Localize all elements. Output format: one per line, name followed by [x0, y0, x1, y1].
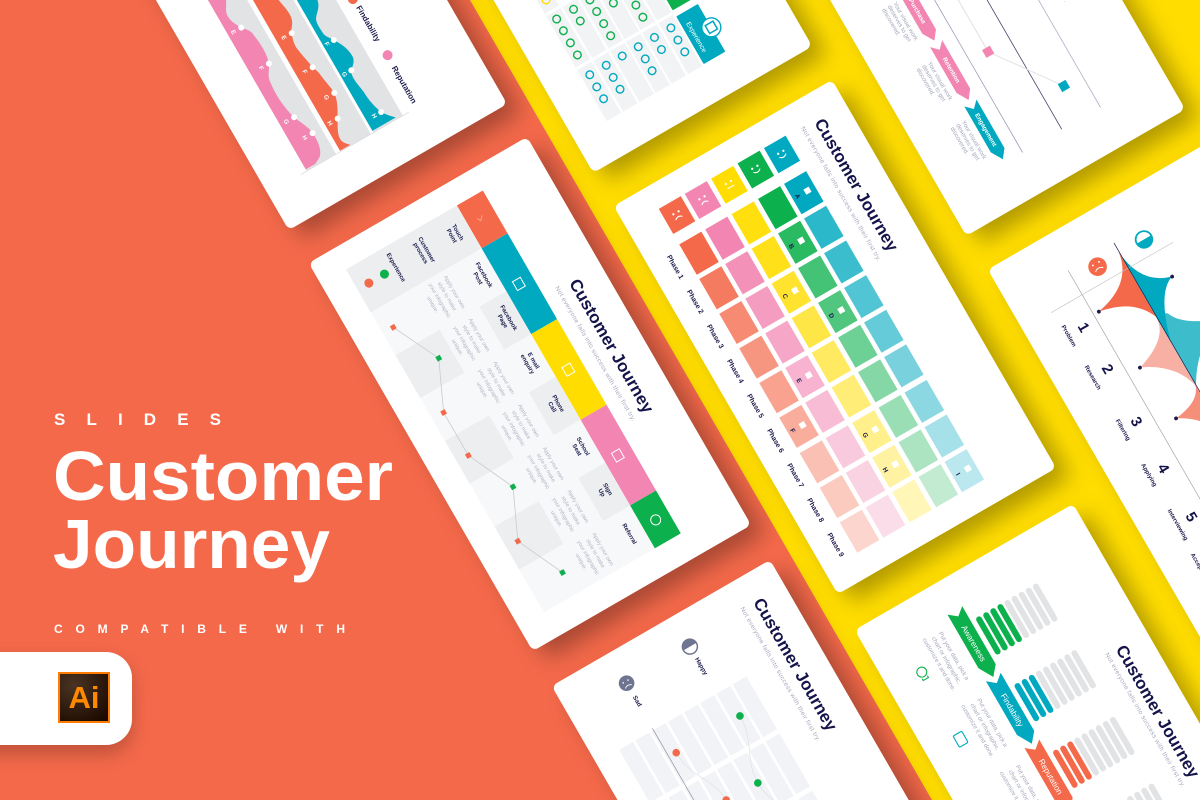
phase labels: Phase 8	[805, 497, 825, 524]
process text blocks: unique.	[450, 338, 464, 357]
arrow: findability: Findability	[999, 692, 1025, 729]
grid strips	[515, 0, 702, 121]
row labels: process	[412, 242, 429, 266]
main title: Customer	[53, 437, 393, 515]
cell markers A to I: F	[788, 428, 796, 435]
curves	[676, 714, 813, 800]
heat grid	[679, 171, 984, 553]
process text blocks: style to make	[461, 324, 482, 355]
title: Customer Journey	[565, 276, 658, 417]
arrow: retention: Retention	[941, 56, 961, 85]
bars: findability	[1018, 653, 1093, 718]
step labels: Problem	[1059, 324, 1077, 348]
process text blocks: style to make	[560, 496, 581, 526]
touch point labels: Post	[471, 272, 483, 286]
touch point labels	[468, 262, 640, 548]
process text blocks: Apply your own	[590, 532, 614, 567]
cell markers A to I: A	[793, 193, 802, 201]
process text blocks: Apply your own	[566, 489, 589, 524]
light teal curve	[1154, 284, 1200, 386]
phase labels: Phase 7	[785, 463, 805, 489]
bars: awareness	[979, 587, 1054, 651]
cell markers A to I: G	[861, 431, 869, 439]
text: findability: customize it and done.	[959, 704, 995, 759]
tab: experience: Experience	[684, 21, 707, 54]
touch point labels: E mail	[526, 352, 540, 371]
row labels: Experience	[385, 252, 406, 284]
teal circles	[585, 23, 690, 104]
text: purchase: discovered.	[880, 8, 901, 38]
experience line chart	[390, 312, 566, 588]
green circles	[551, 0, 648, 60]
process text blocks: style to make	[535, 453, 556, 483]
tab: experience	[676, 0, 734, 64]
title: Customer Journey	[810, 115, 902, 255]
step labels: Interviewing	[1166, 509, 1189, 542]
step numbers	[1072, 320, 1200, 525]
panel: heat map slide	[614, 80, 1056, 594]
text: purchase: Your visual work	[891, 1, 919, 43]
panel: journey map table slide	[309, 137, 751, 651]
subtitle: Not everyone falls into success with their first try.	[738, 606, 822, 743]
step numbers: 4	[1153, 461, 1173, 477]
tab: green	[645, 0, 694, 10]
icon: happy	[679, 636, 700, 657]
text: awareness: customize it and done.	[921, 637, 956, 693]
process text blocks: your infographic	[501, 411, 526, 448]
touch point labels: Facebook	[474, 262, 493, 290]
touch point labels: Call	[546, 401, 557, 414]
row labels	[357, 217, 468, 300]
label: happy: Happy	[693, 656, 709, 677]
process text blocks: Apply your own	[491, 360, 515, 396]
phase labels: Phase 3	[705, 324, 724, 350]
teal curve	[1119, 235, 1200, 343]
step labels: Filtering	[1114, 419, 1131, 442]
wave chart: E	[279, 34, 288, 41]
text: engagement: discovered.	[949, 126, 969, 156]
step labels: Research	[1083, 365, 1102, 391]
touch point labels: Phone	[550, 394, 565, 414]
text: retention: Your visual work	[926, 61, 953, 102]
legend: Findability	[354, 4, 382, 44]
wave chart: H	[300, 134, 309, 142]
process text blocks: style to make	[510, 410, 531, 441]
text: retention: deserves to get	[920, 64, 946, 103]
panel: circles grid slide (top centre)	[369, 0, 812, 173]
grid strips	[619, 676, 843, 800]
arrow: retention	[930, 40, 975, 103]
icon: happy	[1133, 228, 1155, 251]
table background	[346, 205, 655, 612]
label: compatible with: COMPATIBLE WITH	[54, 622, 345, 636]
icon: bulb	[915, 665, 930, 682]
badge: Adobe Illustrator: Ai	[68, 680, 100, 715]
phase labels: Phase 1	[665, 254, 684, 281]
mood legend	[659, 136, 800, 234]
process text blocks: Apply your own	[516, 403, 540, 439]
touch point labels: Seat	[570, 443, 582, 457]
process text blocks: style to make	[436, 281, 457, 312]
wave chart: H	[370, 113, 378, 120]
process text blocks: unique.	[549, 510, 563, 529]
row labels: Point	[445, 228, 457, 244]
panel: progress bars slide (bottom right)	[855, 504, 1200, 800]
phase labels: Phase 6	[765, 428, 785, 454]
touch point labels: School	[575, 437, 590, 457]
process text blocks: your infographic	[575, 540, 600, 576]
icon: sad	[616, 673, 637, 694]
process text blocks: unique.	[524, 467, 538, 486]
phase labels: Phase 5	[745, 393, 765, 420]
subtitle: Not everyone falls into success with their first try.	[799, 126, 882, 263]
text: purchase: deserves to get	[886, 4, 912, 43]
panel: line chart slide (bottom centre)	[552, 560, 994, 800]
text: findability	[959, 696, 1009, 759]
slide content	[346, 169, 718, 612]
arrow: reputation	[1024, 739, 1078, 800]
phase labels: Phase 9	[825, 532, 845, 559]
step labels: Applying	[1139, 463, 1158, 488]
process text blocks: unique.	[475, 381, 489, 400]
process text blocks: Apply your own	[442, 275, 466, 310]
arrow: purchase	[896, 0, 940, 44]
legend: Reputation	[390, 64, 418, 105]
text: engagement	[949, 120, 987, 168]
touch point labels: Referral	[620, 523, 637, 546]
title: Customer Journey	[749, 595, 841, 735]
subtitle: Not everyone falls into success with their first try.	[1103, 652, 1186, 789]
wave chart: G	[282, 118, 290, 126]
points	[671, 711, 779, 800]
axes	[1036, 217, 1200, 617]
text: findability: chart or infographic,	[968, 703, 1000, 752]
row labels: Touch	[450, 224, 464, 242]
arrow: findability	[986, 673, 1039, 748]
tip dots	[1096, 269, 1200, 428]
process text blocks: your infographic	[476, 368, 501, 405]
process text blocks: unique.	[425, 296, 440, 314]
text: retention: discovered.	[915, 67, 935, 97]
process text blocks: your infographic	[427, 283, 452, 319]
process text blocks: unique.	[574, 553, 588, 572]
touch point labels: Up	[596, 488, 606, 498]
text: engagement: Your visual work	[960, 120, 987, 161]
process text blocks: style to make	[584, 538, 606, 569]
cell markers A to I: H	[881, 466, 889, 474]
touch point labels: Facebook	[498, 304, 518, 332]
bars: reputation	[1056, 720, 1131, 785]
arrow: awareness: Awareness	[959, 624, 987, 663]
square markers	[982, 21, 1070, 116]
cell markers A to I: D	[827, 312, 835, 320]
axis	[652, 728, 809, 800]
guide lines	[870, 0, 1101, 152]
process text blocks: your infographic	[551, 497, 575, 534]
process text blocks: unique.	[499, 424, 514, 443]
process text blocks: Apply your own	[467, 318, 490, 353]
label: sad: Sad	[631, 695, 643, 708]
arrow: engagement: Engagement	[973, 112, 998, 148]
touch point labels: enquiry	[519, 354, 535, 376]
journey line	[954, 0, 1064, 110]
text: awareness: Put your data, pick a	[937, 631, 970, 682]
text: purchase	[880, 1, 919, 49]
cell markers A to I: B	[787, 243, 795, 251]
wave chart	[192, 0, 409, 175]
wave chart: H	[325, 120, 334, 128]
legend	[346, 0, 419, 106]
process text blocks: your infographic	[526, 454, 551, 491]
wave chart: F	[257, 65, 265, 72]
bars: fourth stage	[1130, 787, 1170, 800]
wave chart: G	[322, 94, 330, 102]
text: retention	[915, 61, 953, 109]
step numbers: 3	[1126, 414, 1145, 430]
eyebrow: slides: SLIDES	[54, 410, 221, 429]
cell markers A to I: C	[780, 293, 789, 301]
colour header strip	[457, 190, 681, 548]
phase labels: Phase 4	[725, 358, 744, 385]
main title	[53, 437, 393, 583]
text: awareness: chart or infographic,	[930, 636, 962, 685]
panel: area curve slide (right)	[988, 143, 1200, 657]
main title: Journey	[53, 505, 330, 583]
subtitle: Not everyone falls into success with their first try.	[553, 285, 637, 423]
process text blocks: style to make	[485, 367, 507, 398]
wave chart: F	[322, 41, 331, 48]
yellow circle	[541, 0, 551, 5]
arrow: reputation: Reputation	[1037, 757, 1064, 797]
panel: waves slide (top left)	[65, 0, 507, 230]
text: reputation	[998, 762, 1048, 800]
step numbers: 2	[1098, 361, 1117, 377]
arrow: engagement	[964, 99, 1009, 163]
cell markers A to I: E	[794, 377, 803, 385]
process text blocks: Apply your own	[541, 446, 565, 481]
step numbers: 1	[1074, 320, 1093, 335]
phase labels	[665, 254, 845, 559]
arrow: awareness	[947, 606, 1001, 681]
text: engagement: deserves to get	[954, 123, 980, 162]
wave chart: F	[300, 69, 308, 76]
cell markers A to I: I	[954, 472, 961, 477]
step numbers: 5	[1181, 509, 1200, 525]
salmon curves	[1078, 252, 1200, 459]
badge: Adobe Illustrator	[0, 652, 132, 745]
text: findability: Put your data, pick a	[975, 698, 1008, 749]
wave chart: E	[229, 29, 237, 36]
touch point labels: Sign	[601, 482, 613, 497]
text: awareness	[921, 629, 971, 693]
process text blocks: your infographic	[452, 325, 476, 362]
wave chart: G	[340, 71, 348, 79]
touch point labels: Page	[496, 314, 509, 330]
row labels: Customer	[416, 236, 436, 264]
phase labels: Phase 2	[685, 289, 704, 315]
step labels	[1058, 324, 1200, 585]
cell markers A to I	[687, 187, 972, 540]
panel: funnel line slide (top right)	[742, 0, 1184, 236]
process text blocks	[420, 274, 615, 580]
icon: sad	[1085, 254, 1110, 279]
icon: device	[953, 731, 968, 747]
